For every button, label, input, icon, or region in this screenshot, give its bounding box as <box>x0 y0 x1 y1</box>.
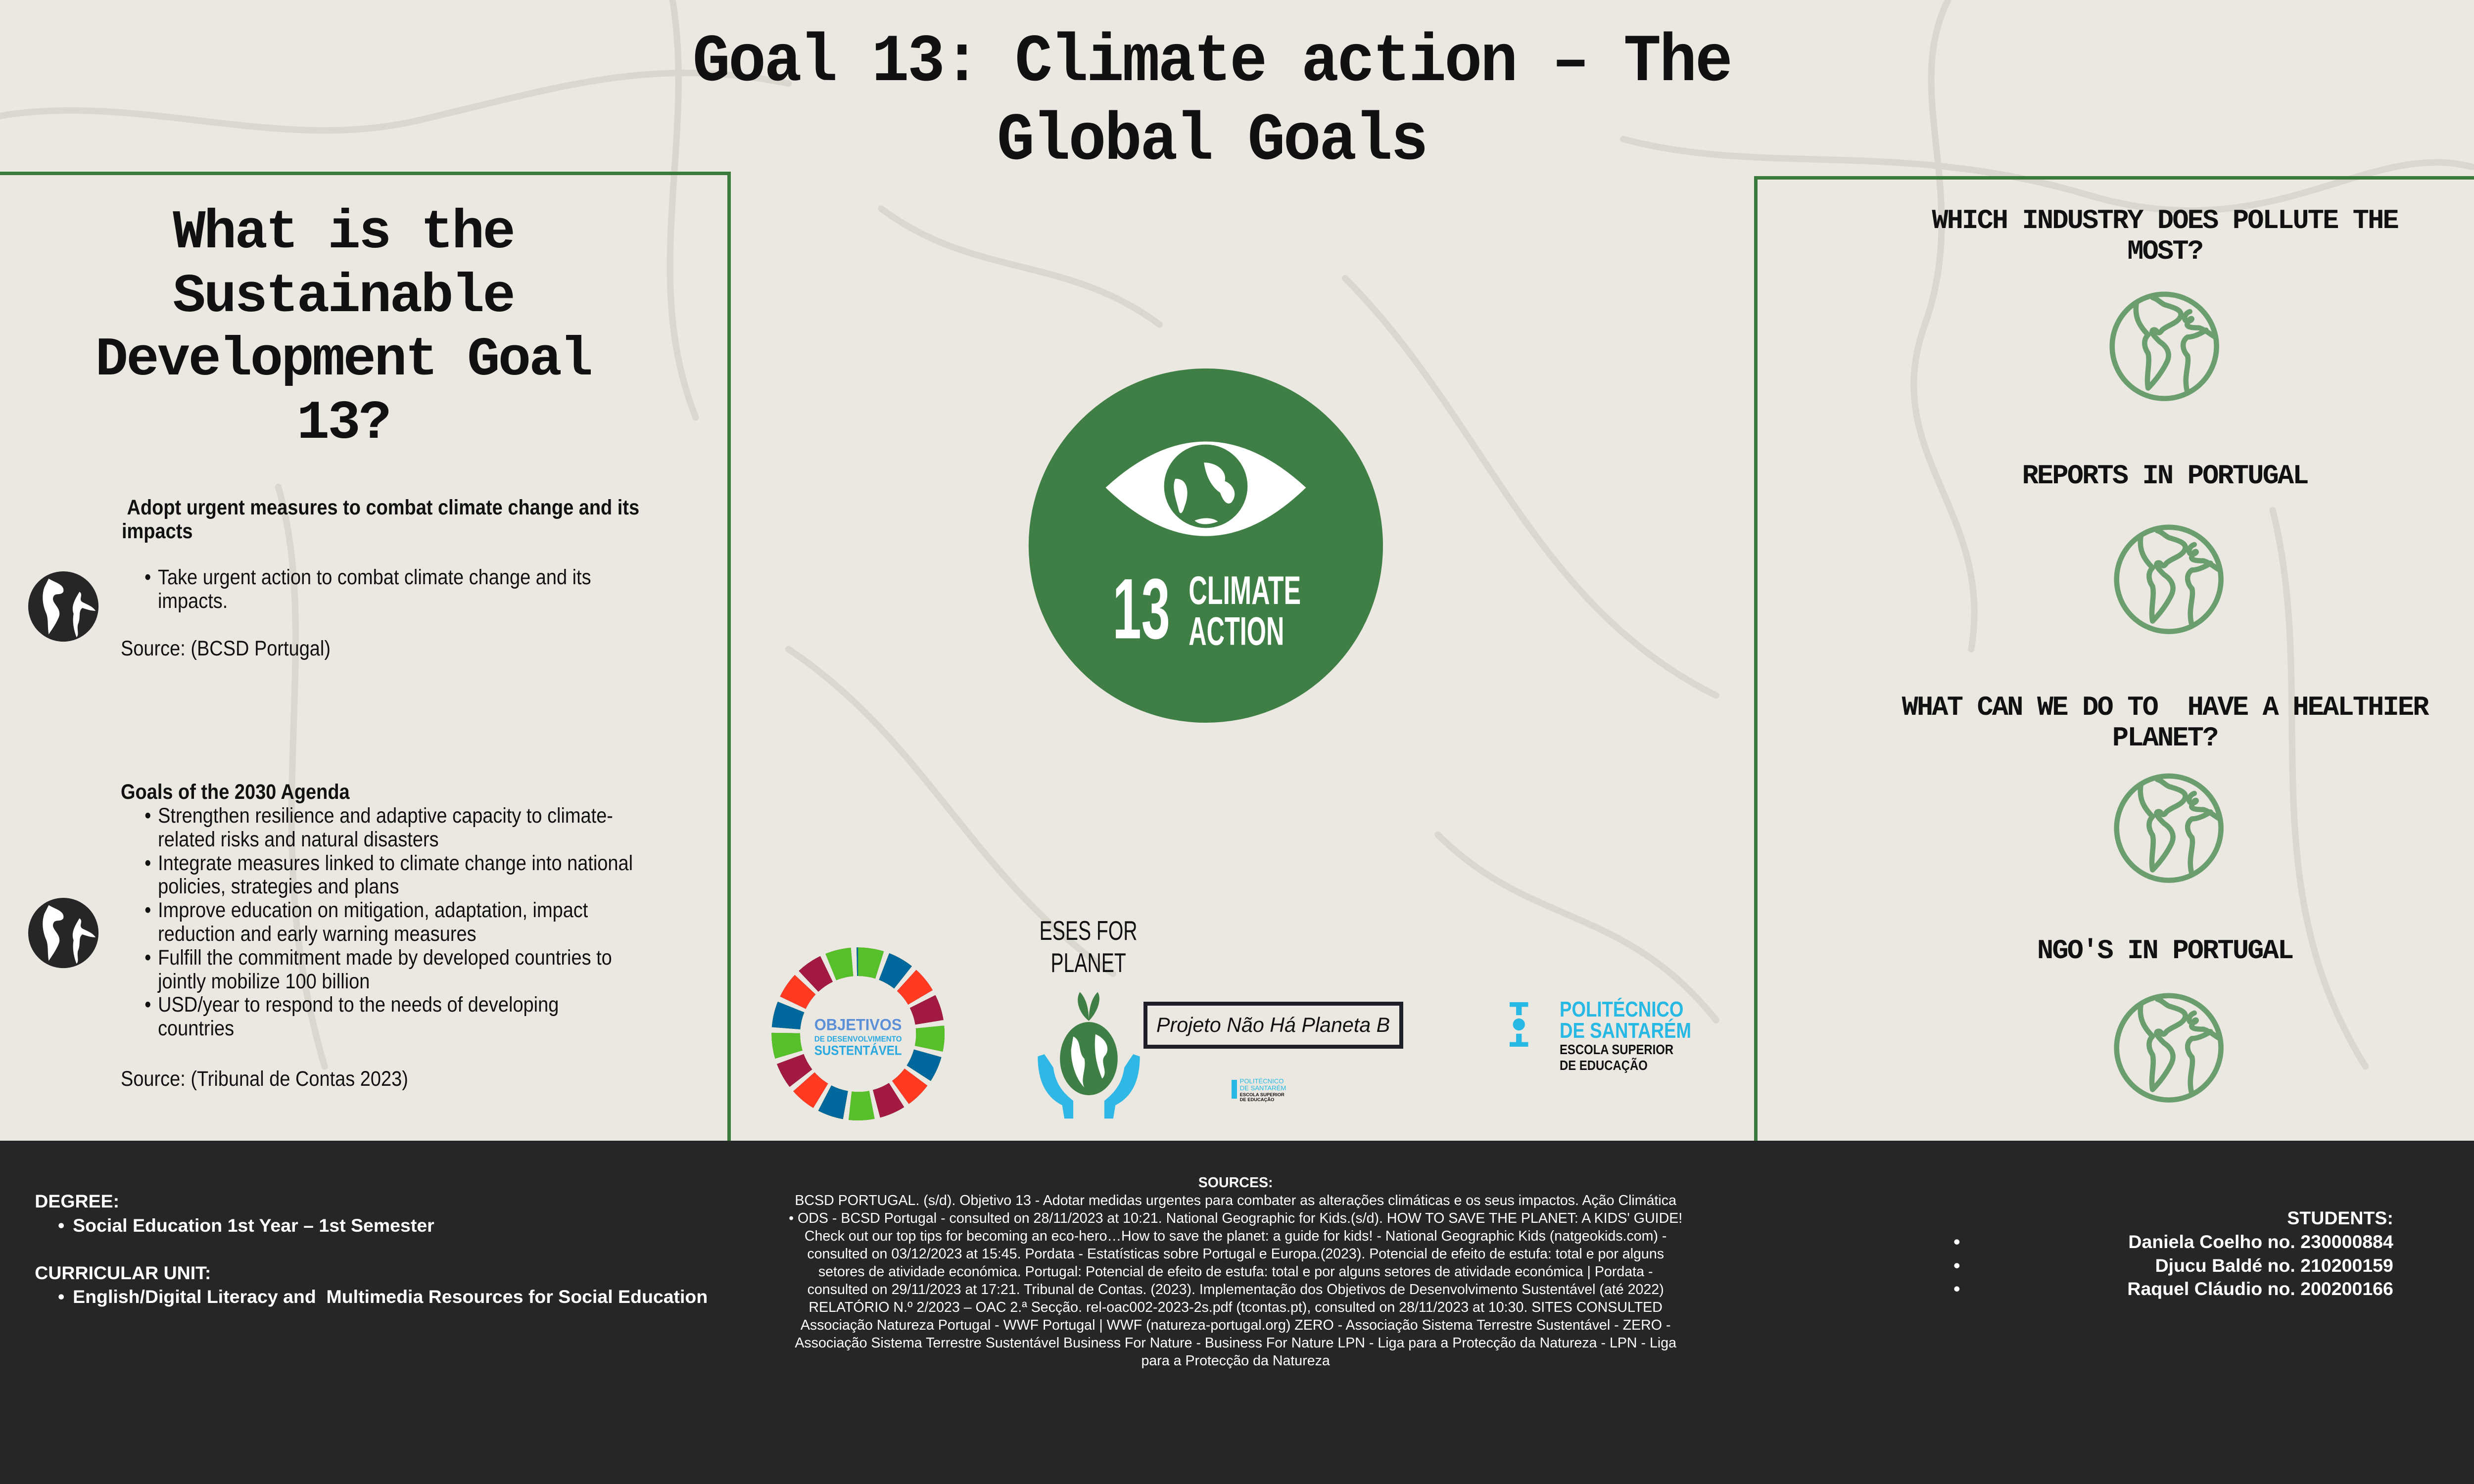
logo: politecnico de santarem: ESCOLA SUPERIOR <box>1560 1042 1674 1057</box>
SDG 13 badge <box>1028 368 1383 723</box>
students: Djucu Baldé no. 210200159 <box>2155 1255 2393 1276</box>
heading: healthier planet: PLANET? <box>2112 723 2217 754</box>
students: STUDENTS: <box>2287 1207 2393 1228</box>
logo: SDG wheel: DE DESENVOLVIMENTO <box>814 1035 902 1044</box>
logo: SDG wheel: SUSTENTÁVEL <box>814 1043 902 1058</box>
text: ESES for planet: ESES FOR <box>1040 915 1138 946</box>
title <box>693 24 1731 179</box>
degree block: Social Education 1st Year – 1st Semester <box>73 1215 434 1236</box>
bullet: take urgent action: Take urgent action to combat climate change and its impacts. <box>158 565 591 612</box>
heading: healthier planet <box>1902 692 2429 754</box>
source 2: Source: (Tribunal de Contas 2023) <box>121 1067 408 1090</box>
panel: left <box>0 172 731 1182</box>
heading: what is SDG 13: 13? <box>297 393 390 455</box>
icon: globe 2 <box>28 898 99 969</box>
text block: goals of 2030 agenda <box>121 780 633 1040</box>
sources: SOURCES: <box>1198 1175 1273 1191</box>
sources: setores de atividade económica. Portugal: Potencial de efeito de estufa: total e por alguns setores de atividade económica | Pordata - <box>818 1264 1653 1280</box>
heading: which industry: MOST? <box>2127 236 2202 267</box>
logo: small politecnico: POLITÉCNICO <box>1240 1077 1284 1085</box>
text block: goals of 2030 agenda: Fulfill the commitment made by developed countries to jointly mobilize 100 billion <box>158 946 612 993</box>
student bullets: • <box>1953 1255 1960 1276</box>
heading: healthier planet: WHAT CAN WE DO TO HAVE A HEALTHIER <box>1902 692 2428 723</box>
text: ESES for planet <box>1040 915 1138 978</box>
heading: what is SDG 13 <box>95 202 591 455</box>
student bullets <box>1953 1231 1960 1299</box>
source 1: Source: (BCSD Portugal) <box>121 637 331 660</box>
text block: goals of 2030 agenda: Goals of the 2030 Agenda <box>121 780 349 803</box>
sources <box>789 1175 1682 1369</box>
students <box>2127 1207 2393 1299</box>
degree block: DEGREE: <box>35 1191 119 1211</box>
heading: what is SDG 13: Sustainable <box>173 266 514 328</box>
text block: goals of 2030 agenda: Strengthen resilience and adaptive capacity to climate-related risks and natural disasters <box>158 804 613 851</box>
logo: politecnico de santarem: DE SANTARÉM <box>1560 1019 1691 1043</box>
label: 13 climate action: 13 <box>1113 561 1170 657</box>
heading: which industry <box>1932 205 2398 267</box>
logo: small politecnico: ESCOLA SUPERIOR <box>1240 1092 1285 1097</box>
logo: small politecnico: DE SANTARÉM <box>1240 1084 1286 1092</box>
logo: small politecnico: DE EDUCAÇÃO <box>1240 1097 1274 1102</box>
label: 13 climate action: CLIMATE <box>1189 568 1301 613</box>
text block: goals of 2030 agenda: USD/year to respond to the needs of developing countries <box>158 993 559 1040</box>
title: Goal 13: Climate action – The <box>693 24 1731 100</box>
text block: adopt urgent measures: Adopt urgent measures to combat climate change and its impacts <box>122 496 639 543</box>
degree block <box>35 1191 708 1307</box>
heading: what is SDG 13: Development Goal <box>95 329 591 391</box>
sources: consulted on 03/12/2023 at 15:45. Pordata - Estatísticas sobre Portugal e Europa.(2023). Potencial de efeito de estufa: total e por alguns <box>807 1246 1664 1262</box>
students: Raquel Cláudio no. 200200166 <box>2127 1278 2393 1299</box>
label: 13 climate action: ACTION <box>1189 609 1285 654</box>
logo: politecnico de santarem <box>1510 998 1691 1073</box>
students: Daniela Coelho no. 230000884 <box>2128 1231 2393 1252</box>
degree block: English/Digital Literacy and Multimedia Resources for Social Education <box>73 1286 708 1307</box>
footer <box>0 1141 2474 1391</box>
heading: what is SDG 13: What is the <box>173 202 514 264</box>
sources: RELATÓRIO N.º 2/2023 – OAC 2.ª Secção. rel-oac002-2023-2s.pdf (tcontas.pt), consulted on 28/11/2023 at 10:30. SITES CONSULTED <box>809 1299 1663 1315</box>
sources: Associação Natureza Portugal - WWF Portugal | WWF (natureza-portugal.org) ZERO - Associação Sistema Terrestre Sustentável - ZERO - <box>801 1317 1670 1333</box>
heading: ngos: NGO'S IN PORTUGAL <box>2037 935 2292 967</box>
logo: SDG wheel: OBJETIVOS <box>814 1016 902 1034</box>
text block: goals of 2030 agenda: Integrate measures linked to climate change into national policies, strategies and plans <box>158 851 633 898</box>
icon: globe outline 2 <box>2114 524 2224 634</box>
logo: politecnico de santarem: DE EDUCAÇÃO <box>1560 1058 1648 1073</box>
icon: globe outline 1 <box>2109 292 2219 401</box>
logo: politecnico de santarem: POLITÉCNICO <box>1560 998 1684 1021</box>
logo: SDG wheel <box>771 947 945 1120</box>
logo: small politecnico <box>1232 1077 1286 1102</box>
sources: consulted on 29/11/2023 at 17:21. Tribunal de Contas. (2023). Implementação dos Objetivos de Desenvolvimento Sustentável (até 2022) <box>808 1282 1664 1298</box>
icon: globe in hands <box>1038 992 1140 1119</box>
panel: right <box>1754 176 2474 1182</box>
sources: BCSD PORTUGAL. (s/d). Objetivo 13 - Adotar medidas urgentes para combater as alterações climáticas e os seus impactos. Ação Climática <box>795 1193 1676 1208</box>
student bullets: • <box>1953 1278 1960 1299</box>
heading: reports in portugal: REPORTS IN PORTUGAL <box>2022 461 2308 492</box>
sources: Associação Sistema Terrestre Sustentável Business For Nature - Business For Nature LPN - Liga para a Protecção da Natureza - LPN - Liga <box>795 1335 1676 1351</box>
icon: eye with globe <box>1106 442 1306 536</box>
icon: globe outline 4 <box>2114 993 2224 1103</box>
box: projeto nao ha planeta B: Projeto Não Há Planeta B <box>1156 1014 1390 1036</box>
box: projeto nao ha planeta B <box>1143 1002 1403 1049</box>
text block: goals of 2030 agenda: Improve education on mitigation, adaptation, impact reduction and early warning measures <box>158 898 588 945</box>
icon: globe outline 3 <box>2114 774 2224 883</box>
icon: globe 1 <box>28 571 99 642</box>
sources: para a Protecção da Natureza <box>1142 1353 1330 1369</box>
sources: • ODS - BCSD Portugal - consulted on 28/11/2023 at 10:21. National Geographic for Kids.(s/d). HOW TO SAVE THE PLANET: A KIDS' GUIDE! <box>789 1210 1682 1226</box>
heading: which industry: WHICH INDUSTRY DOES POLLUTE THE <box>1932 205 2398 236</box>
sources: Check out our top tips for becoming an eco-hero…How to save the planet: a guide for kids! - National Geographic Kids (natgeokids.com) - <box>805 1228 1666 1244</box>
degree block: CURRICULAR UNIT: <box>35 1262 211 1283</box>
label: 13 climate action <box>1113 561 1301 657</box>
text: ESES for planet: PLANET <box>1051 948 1126 978</box>
student bullets: • <box>1953 1231 1960 1252</box>
title: Global Goals <box>997 103 1427 179</box>
